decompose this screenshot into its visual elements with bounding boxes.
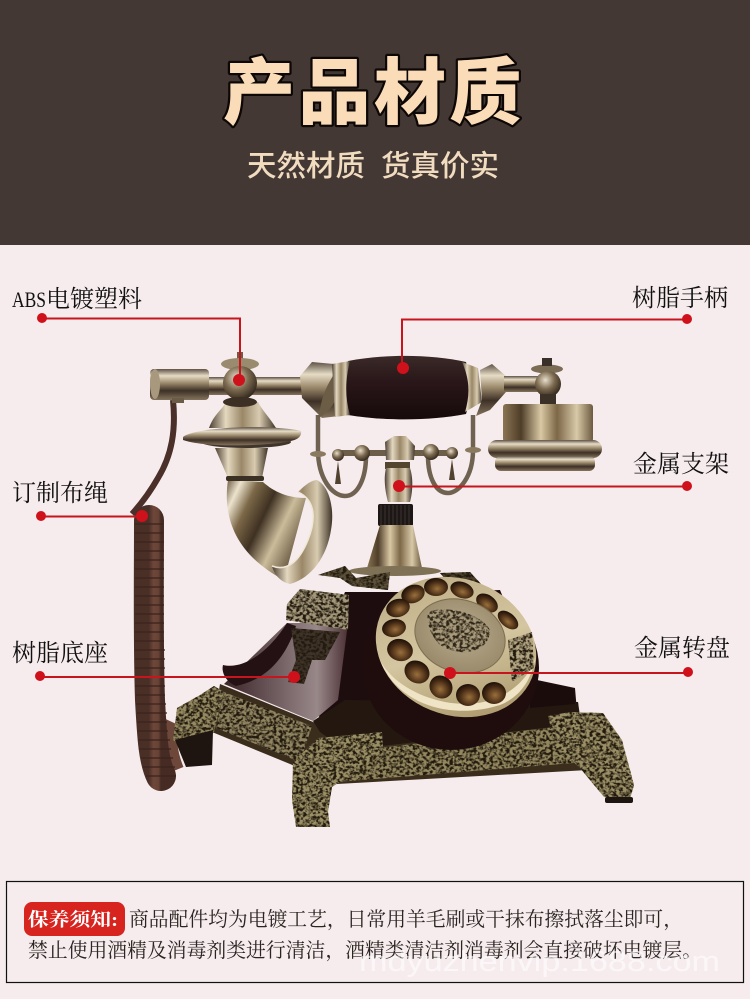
callout: resin handle: 树脂手柄 bbox=[632, 285, 728, 312]
notice badge bbox=[24, 902, 125, 936]
callout: custom cloth cord: 订制布绳 bbox=[12, 480, 108, 507]
callout: metal bracket: 金属支架 bbox=[633, 451, 729, 478]
right foot bbox=[548, 712, 634, 799]
header band bbox=[0, 0, 750, 245]
callout: metal dial bbox=[444, 635, 730, 679]
right foot pad bbox=[605, 797, 633, 803]
left foot pad bbox=[175, 730, 213, 767]
rotary dial bbox=[354, 553, 558, 741]
base front gold band bbox=[337, 724, 586, 782]
hanging ornament bbox=[288, 628, 340, 684]
subtitle: 天然材质 bbox=[247, 150, 365, 183]
care notice panel bbox=[6, 882, 744, 982]
dark leaf ornament right bbox=[440, 572, 482, 585]
left neck and plate bbox=[183, 402, 306, 580]
receiver top ball bbox=[221, 352, 259, 407]
watermark: mdyuzhenvip.1688.com bbox=[359, 946, 720, 978]
left body flare bbox=[223, 623, 296, 686]
cradle cross arm bbox=[310, 436, 481, 484]
callout: custom cloth cord bbox=[12, 480, 148, 522]
subtitle: 货真价实 bbox=[381, 150, 499, 183]
callout: ABS plating bbox=[12, 286, 245, 386]
coiled cord bbox=[135, 520, 176, 776]
callout: ABS plating: ABS bbox=[12, 287, 46, 312]
callout: ABS plating: 电镀塑料 bbox=[46, 286, 142, 313]
cord upper strand bbox=[132, 400, 174, 514]
callout: resin handle bbox=[397, 285, 728, 374]
right receiver knob bbox=[531, 358, 563, 404]
cord tail behind base bbox=[169, 722, 176, 770]
front foot bbox=[292, 732, 383, 827]
leaf ornaments bbox=[318, 566, 390, 590]
left foot bbox=[173, 686, 224, 748]
telephone illustration bbox=[132, 352, 634, 827]
dark body bbox=[300, 590, 577, 726]
title: 产品材质 bbox=[223, 54, 525, 134]
right cradle hook bbox=[428, 415, 473, 493]
dial housing bbox=[363, 586, 539, 750]
callout: resin base bbox=[12, 640, 300, 683]
notice text line 2: 禁止使用酒精及消毒剂类进行清洁，酒精类清洁剂消毒剂会直接破坏电镀层。 bbox=[28, 939, 702, 962]
base shadow strip bbox=[313, 700, 580, 750]
receiver black handle bbox=[344, 356, 470, 419]
notice badge: 保养须知: bbox=[28, 909, 118, 931]
base platform bbox=[212, 684, 588, 784]
notice text line 1: 商品配件均为电镀工艺，日常用羊毛刷或干抹布擦拭落尘即可， bbox=[129, 908, 683, 931]
base left frieze bbox=[216, 692, 312, 762]
right flare bbox=[530, 680, 575, 708]
receiver bbox=[150, 356, 542, 419]
left body face bbox=[224, 623, 348, 721]
callout: metal bracket bbox=[393, 451, 729, 492]
callout: metal dial: 金属转盘 bbox=[634, 635, 730, 662]
callout: resin base: 树脂底座 bbox=[12, 640, 108, 667]
left cradle hook bbox=[318, 415, 366, 496]
bell bbox=[488, 404, 602, 471]
mouthpiece horn bbox=[272, 480, 332, 584]
top ornament bbox=[286, 589, 349, 630]
central pillar bbox=[349, 462, 441, 576]
